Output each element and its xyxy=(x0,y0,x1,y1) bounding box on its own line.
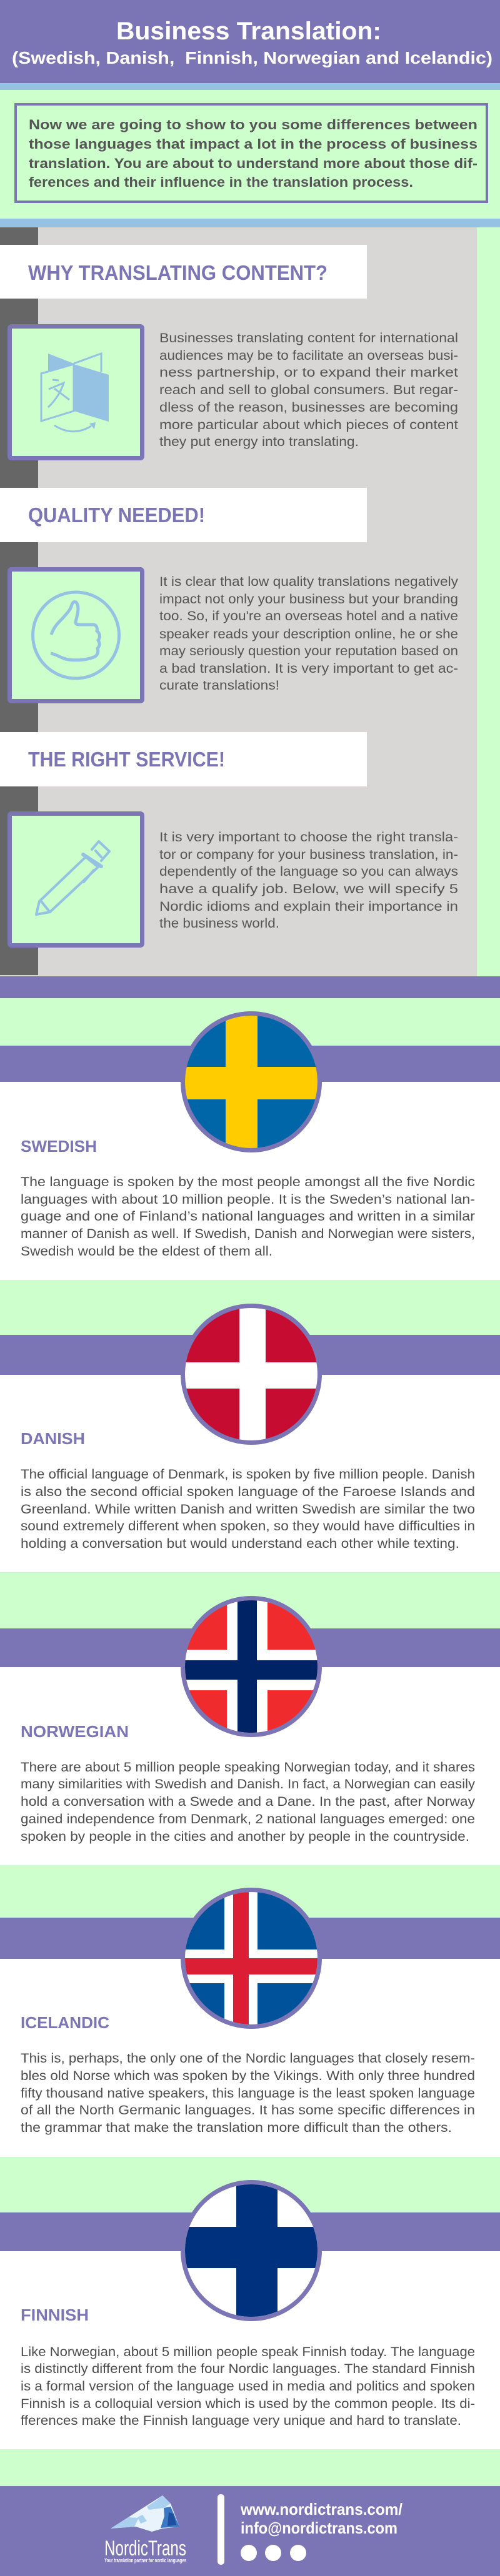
text: quality needed: It is clear that low quality translations negatively xyxy=(159,574,458,589)
header banner xyxy=(0,0,500,83)
text: norwegian xyxy=(21,1760,475,1844)
divider band xyxy=(0,976,500,998)
footer xyxy=(0,2449,500,2576)
heading: why translating content: WHY TRANSLATING CONTENT? xyxy=(28,261,328,284)
icon: pen xyxy=(10,813,142,946)
text: why translating content: they put energy into translating. xyxy=(159,434,359,449)
text: norwegian: spoken by people in the cities and another by people in the countryside. xyxy=(21,1829,469,1844)
text: why translating content: ness partnership, or to expand their market xyxy=(159,365,458,380)
panel: the right service xyxy=(0,732,458,946)
heading: danish: DANISH xyxy=(21,1429,85,1448)
text: why translating content: more particular about which pieces of content xyxy=(159,417,458,432)
intro text: Now we are going to show to you some differences between xyxy=(29,117,478,132)
text: why translating content xyxy=(159,330,458,449)
text: swedish: Swedish would be the eldest of them all. xyxy=(21,1244,272,1259)
heading: the right service: THE RIGHT SERVICE! xyxy=(28,748,225,771)
text: finnish: fferences make the Finnish language very unique and hard to translate. xyxy=(21,2413,461,2428)
text: the right service: the business world. xyxy=(159,916,279,931)
contact details xyxy=(240,2500,402,2537)
contact details: info@nordictrans.com xyxy=(241,2519,398,2537)
panel: danish xyxy=(0,1280,500,1551)
text: swedish: manner of Danish as well. If Swedish, Danish and Norwegian were sisters, xyxy=(21,1226,475,1241)
text: the right service: Nordic idioms and explain their importance in xyxy=(159,899,458,914)
intro panel xyxy=(0,83,500,227)
text: norwegian: hold a conversation with a Swede and a Dane. In the past, after Norway xyxy=(21,1794,475,1809)
text: swedish xyxy=(21,1174,475,1259)
icon: finnish flag xyxy=(181,2180,322,2321)
text: icelandic: bles old Norse which was spoken by the Vikings. With only three hundred xyxy=(21,2068,475,2083)
text: norwegian: many similarities with Swedish and Danish. In fact, a Norwegian can easily xyxy=(21,1776,475,1791)
text: the right service xyxy=(159,830,458,931)
text: icelandic: of all the North Germanic languages. It has some specific differences in xyxy=(21,2103,475,2118)
icon: icelandic flag xyxy=(181,1888,322,2029)
text: danish: holding a conversation but would understand each other while texting. xyxy=(21,1536,459,1551)
text: why translating content: reach and sell to global consumers. But regar- xyxy=(159,382,458,397)
text: danish: is also the second official spoken language of the Faroese Islands and xyxy=(21,1484,475,1499)
panel: norwegian xyxy=(0,1572,500,1844)
text: icelandic xyxy=(21,2051,475,2135)
text: quality needed: a bad translation. It is very important to get ac- xyxy=(159,661,458,676)
panel: swedish xyxy=(0,998,500,1259)
text: quality needed: too. So, if you're an overseas hotel and a native xyxy=(159,608,458,623)
logo wordmark xyxy=(104,2537,186,2564)
text: swedish: guage and one of Finland’s national languages and written in a similar xyxy=(21,1209,475,1224)
intro text: translation. You are about to understand more about those dif- xyxy=(29,156,478,171)
text: norwegian: There are about 5 million people speaking Norwegian today, and it shares xyxy=(21,1760,475,1775)
panel: icelandic xyxy=(0,1865,500,2135)
panel: finnish xyxy=(0,2157,500,2428)
text: danish: The official language of Denmark, is spoken by five million people. Danish xyxy=(21,1467,475,1482)
text: quality needed: speaker reads your description online, he or she xyxy=(159,627,458,642)
text: finnish: Finnish is a colloquial version which is used by the common people. Its di- xyxy=(21,2396,475,2411)
icon: swedish flag xyxy=(181,1011,322,1152)
logo wordmark: NordicTrans xyxy=(104,2537,186,2560)
title xyxy=(12,17,492,67)
intro text: those languages that impact a lot in the process of business xyxy=(29,136,478,152)
heading: icelandic: ICELANDIC xyxy=(21,2013,109,2032)
text: danish xyxy=(21,1467,475,1551)
title: (Swedish, Danish, Finnish, Norwegian and Icelandic) xyxy=(12,48,492,67)
text: danish: Greenland. While written Danish and written Swedish are similar the two xyxy=(21,1502,475,1517)
text: icelandic: This is, perhaps, the only one of the Nordic languages that closely resem- xyxy=(21,2051,475,2066)
panel: why translating content xyxy=(0,245,458,458)
title: Business Translation: xyxy=(116,17,381,45)
text: the right service: It is very important to choose the right transla- xyxy=(159,830,458,845)
text: finnish: Like Norwegian, about 5 million people speak Finnish today. The language xyxy=(21,2344,475,2359)
intro text: ferences and their influence in the translation process. xyxy=(29,174,413,190)
text: norwegian: gained independence from Denmark, 2 national languages emerged: one xyxy=(21,1811,475,1826)
icon: norwegian flag xyxy=(181,1596,322,1737)
heading: norwegian: NORWEGIAN xyxy=(21,1722,129,1741)
text: quality needed: impact not only your business but your branding xyxy=(159,592,458,607)
contact details: www.nordictrans.com/ xyxy=(240,2500,402,2519)
text: why translating content: dless of the reason, businesses are becoming xyxy=(159,400,458,415)
intro text xyxy=(29,117,478,190)
text: finnish: is distinctly different from the four Nordic languages. The standard Finnish xyxy=(21,2361,475,2376)
text: icelandic: fifty thousand native speakers, this language is the least spoken language xyxy=(21,2086,475,2101)
heading: swedish: SWEDISH xyxy=(21,1137,97,1156)
logo wordmark: Your translation partner for nordic languages xyxy=(104,2557,186,2564)
heading: quality needed: QUALITY NEEDED! xyxy=(28,503,205,527)
text: danish: sound extremely different when spoken, so they would have difficulties in xyxy=(21,1518,475,1533)
icon: thumbs up xyxy=(10,570,142,701)
social dots xyxy=(241,2545,306,2561)
panel: why, quality and service background xyxy=(0,227,500,976)
text: finnish xyxy=(21,2344,475,2428)
panel: quality needed xyxy=(0,488,458,701)
text: finnish: is a formal version of the language used in media and politics and spoken xyxy=(21,2379,475,2394)
text: quality needed: may seriously question your reputation based on xyxy=(159,643,458,658)
text: the right service: dependently of the language so you can always xyxy=(159,864,458,879)
text: the right service: tor or company for your business translation, in- xyxy=(159,847,458,862)
text: quality needed xyxy=(159,574,458,693)
icon: danish flag xyxy=(181,1304,322,1445)
text: why translating content: audiences may be to facilitate an overseas busi- xyxy=(159,348,458,363)
vertical divider xyxy=(218,2494,224,2565)
text: swedish: languages with about 10 million people. It is the Sweden’s national lan- xyxy=(21,1192,475,1207)
icon: nordictrans iceberg logo xyxy=(111,2495,179,2532)
text: quality needed: curate translations! xyxy=(159,678,279,693)
icon: translation book xyxy=(10,326,142,458)
text: icelandic: the grammar that make the translation more difficult than the others. xyxy=(21,2120,452,2135)
text: the right service: have a qualify job. Below, we will specify 5 xyxy=(159,881,458,896)
text: swedish: The language is spoken by the most people amongst all the five Nordic xyxy=(21,1174,475,1189)
heading: finnish: FINNISH xyxy=(21,2306,89,2324)
text: why translating content: Businesses translating content for international xyxy=(159,330,458,345)
